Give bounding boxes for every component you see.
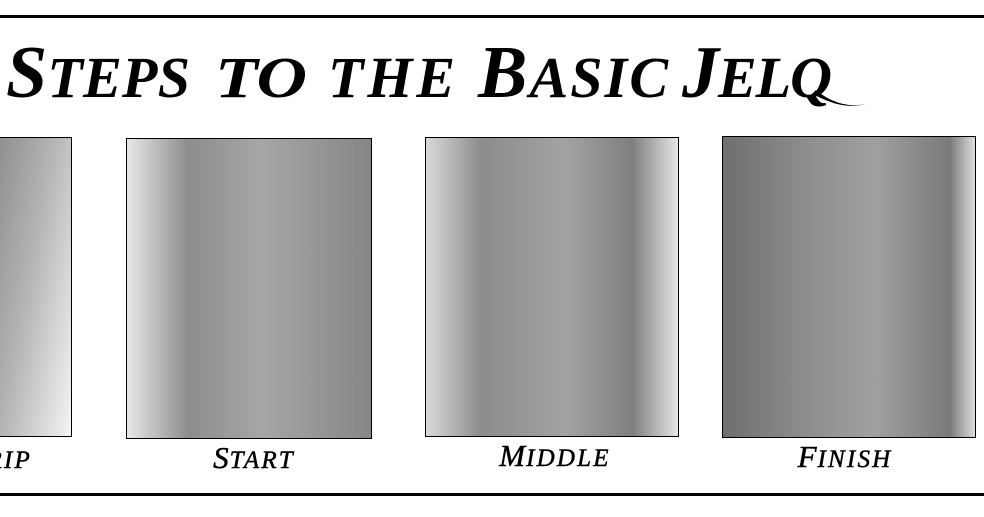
caption: middle: MIDDLE [499,438,611,473]
title: BASIC [477,32,669,114]
title [6,32,866,114]
panel: start image placeholder [126,138,372,439]
panel: grip image placeholder [0,137,72,437]
caption: start: START [213,440,295,475]
title: STEPS [6,32,190,114]
caption: finish: FINISH [798,439,892,474]
title: JELQ [681,32,832,114]
title: TO [215,45,307,110]
title: THE [328,45,455,110]
panel: middle image placeholder [425,137,679,437]
panel: finish image placeholder [722,136,976,438]
